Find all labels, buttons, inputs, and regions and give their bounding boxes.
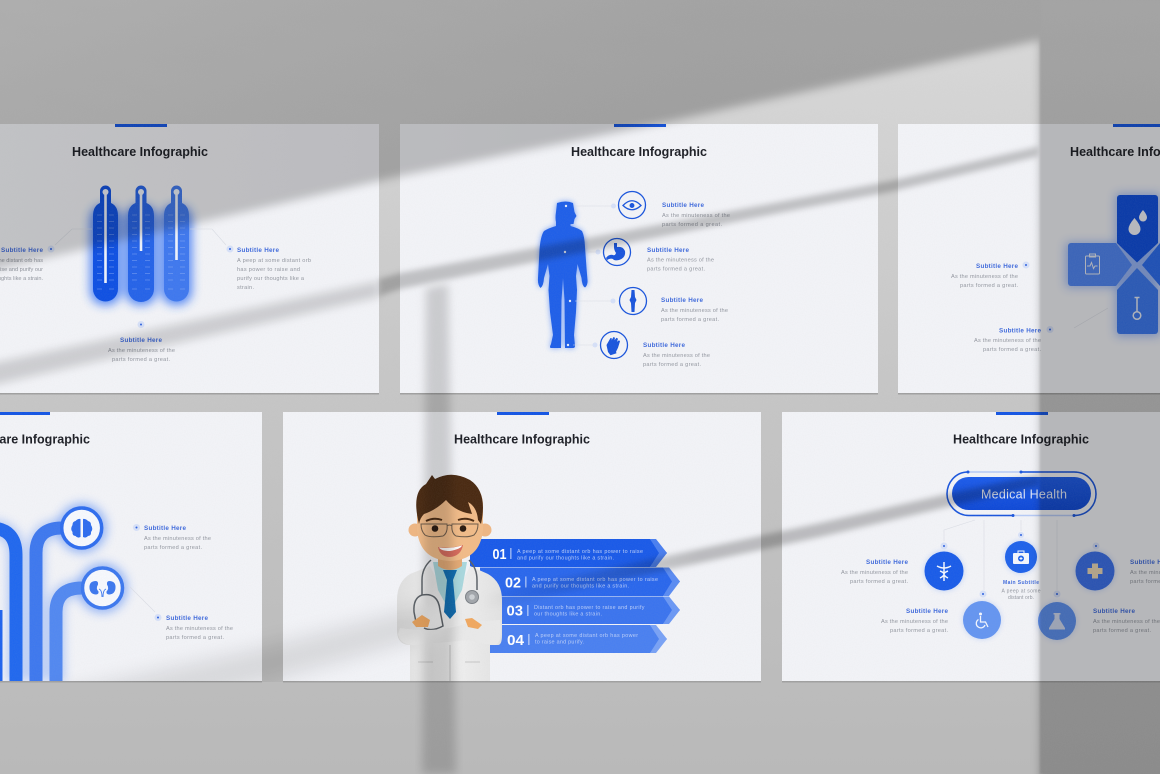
callout: bottom thermometer: Subtitle Here (120, 337, 162, 344)
node: main subtitle medical kit (1002, 532, 1041, 601)
banner 01 (470, 539, 667, 567)
callout: test tube block: Subtitle Here (999, 328, 1041, 334)
callout: kidneys: As the minuteness of the (166, 626, 233, 632)
slide 3: cross diagram (898, 124, 1160, 394)
banner 02: and purify our thoughts like a strain. (532, 584, 629, 590)
banner 04: 04 (507, 632, 525, 649)
node: main subtitle medical kit: Main Subtitle (1003, 580, 1039, 586)
callout: hand: Subtitle Here (643, 342, 685, 349)
callout: clipboard block: As the minuteness of the (951, 274, 1018, 280)
medical health pill: Medical Health (981, 488, 1067, 502)
callout: test tube block: As the minuteness of the (974, 338, 1041, 344)
callout: brain: parts formed a great. (144, 545, 202, 551)
slide 4: organ pipes (0, 412, 262, 682)
callout: clipboard block: parts formed a great. (960, 283, 1018, 289)
banner 02: A peep at some distant orb has power to raise (532, 577, 658, 583)
callout: brain (133, 524, 211, 551)
slide 6 heading: Healthcare Infographic (953, 432, 1089, 446)
callout: eye: parts formed a great. (662, 222, 722, 228)
callout: test tube block (974, 308, 1108, 353)
callout: hand: parts formed a great. (643, 362, 701, 368)
callout: bottom thermometer (108, 321, 175, 363)
callout: left thermometer: Subtitle Here (1, 247, 43, 254)
slide 2: body map (400, 124, 878, 394)
callout: kidneys: parts formed a great. (166, 635, 224, 641)
node: wheelchair: parts formed a great. (890, 628, 948, 634)
icon: kidneys (82, 568, 122, 608)
callout: bottom thermometer: parts formed a great. (112, 357, 170, 363)
node: plus (1076, 542, 1160, 590)
glasses (421, 524, 478, 537)
node: wheelchair: Subtitle Here (906, 608, 948, 615)
node: flask: parts formed a great. (1093, 628, 1151, 634)
icon: bone joint (620, 288, 646, 314)
banner 02 (480, 568, 680, 596)
callout: eye: As the minuteness of the (662, 213, 730, 219)
hair (416, 475, 483, 524)
slide 5 heading: Healthcare Infographic (454, 432, 590, 446)
icon: medical kit (1013, 551, 1029, 564)
icon: test tube (1133, 298, 1141, 319)
callout: clipboard block: Subtitle Here (976, 263, 1018, 270)
node: main subtitle medical kit: distant orb. (1008, 595, 1034, 601)
callout: eye: Subtitle Here (662, 202, 704, 209)
callout: brain: As the minuteness of the (144, 536, 211, 542)
callout: right thermometer: A peep at some distant orb (237, 258, 311, 264)
shirt and tie (433, 562, 467, 602)
node: wheelchair (881, 590, 1001, 639)
pipe diagram (0, 503, 128, 681)
coat (397, 566, 502, 681)
eyes (432, 525, 438, 532)
callout: knee bone: As the minuteness of the (661, 308, 728, 314)
connector lines (944, 520, 1057, 590)
callout: bottom thermometer: As the minuteness of the (108, 348, 175, 354)
callout: right thermometer (190, 229, 311, 291)
human body silhouette (538, 202, 588, 348)
slide 5: doctor with numbered banners (283, 412, 761, 682)
numbered arrow banners (470, 539, 680, 653)
node: caduceus: Subtitle Here (866, 559, 908, 566)
banner 04: to raise and purify. (535, 640, 584, 646)
node: flask (1038, 590, 1160, 640)
node: flask: Subtitle Here (1093, 608, 1135, 615)
banner 03: Distant orb has power to raise and purify (534, 605, 645, 611)
icon: clipboard (1086, 254, 1100, 274)
cross of four rounded blocks (1066, 194, 1160, 336)
callout: stomach (588, 238, 714, 272)
node: caduceus (841, 542, 964, 590)
callout: right thermometer: Subtitle Here (237, 247, 279, 254)
callout: knee bone (575, 288, 728, 323)
brows (426, 519, 474, 521)
callout: hand: As the minuteness of the (643, 353, 710, 359)
coat details (418, 645, 480, 681)
icon: water drops (1128, 210, 1147, 235)
icon: plus (1088, 564, 1102, 578)
callout: brain: Subtitle Here (144, 525, 186, 532)
banner 04 (480, 625, 667, 653)
callout: kidneys (130, 587, 233, 641)
icon: brain (62, 508, 102, 548)
node: main subtitle medical kit: A peep at some (1002, 588, 1041, 594)
banner 04: A peep at some distant orb has power (535, 633, 638, 639)
node: wheelchair: As the minuteness of the (881, 619, 948, 625)
slide 2 heading: Healthcare Infographic (571, 144, 707, 159)
hands (412, 615, 430, 627)
slide 1 heading: Healthcare Infographic (72, 144, 208, 159)
callout: knee bone: Subtitle Here (661, 297, 703, 304)
medical health pill (947, 470, 1096, 517)
banner 01: A peep at some distant orb has power to raise (517, 549, 643, 555)
banner 01: 01 (492, 546, 506, 563)
slide 1: thermometers (0, 124, 379, 394)
icon: stomach (604, 238, 630, 266)
node: caduceus: parts formed a great. (850, 579, 908, 585)
callout: hand (573, 332, 710, 368)
banner 01: and purify our thoughts like a strain. (517, 556, 614, 562)
banner 03: our thoughts like a strain. (534, 612, 602, 618)
icon: flask (1049, 613, 1065, 630)
callout: stomach: parts formed a great. (647, 266, 705, 272)
callout: knee bone: parts formed a great. (661, 317, 719, 323)
icon: hand bones (600, 332, 628, 358)
ears (408, 524, 418, 536)
callout: kidneys: Subtitle Here (166, 615, 208, 622)
slide 6: medical health hierarchy (782, 412, 1160, 682)
callout: right thermometer: purify our thoughts like a (237, 276, 305, 282)
banner 03: 03 (506, 602, 523, 620)
callout: stomach: Subtitle Here (647, 247, 689, 254)
callout: left thermometer (0, 229, 92, 282)
node: flask: As the minuteness of the (1093, 619, 1160, 625)
icon: wheelchair (976, 612, 988, 628)
icon: eye (618, 192, 646, 218)
node: caduceus: As the minuteness of the (841, 570, 908, 576)
icon: caduceus (937, 562, 951, 581)
callout: right thermometer: has power to raise and (237, 267, 300, 273)
callout: stomach: As the minuteness of the (647, 258, 714, 264)
callout: test tube block: parts formed a great. (983, 347, 1041, 353)
smile (438, 545, 463, 557)
thermometer chart (90, 186, 192, 305)
neck (438, 559, 462, 570)
callout: clipboard block (951, 262, 1030, 289)
stethoscope (414, 560, 477, 630)
banner 03 (480, 596, 680, 624)
callout: right thermometer: strain. (237, 285, 254, 291)
face (417, 491, 483, 561)
callout: eye (575, 192, 730, 228)
crossed arms (398, 628, 436, 642)
doctor character (397, 475, 502, 681)
banner 02: 02 (505, 574, 521, 592)
